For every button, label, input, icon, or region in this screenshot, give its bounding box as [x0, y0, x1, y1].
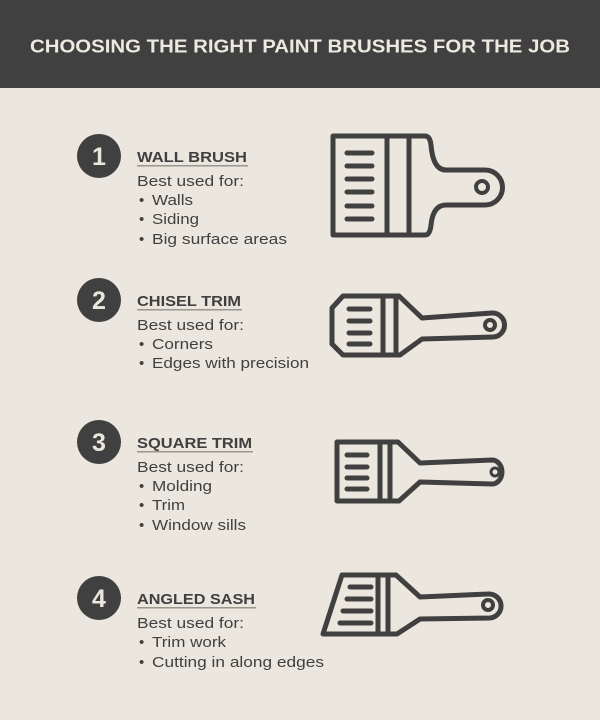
list: square trim uses: Best used for: — [137, 459, 244, 476]
heading: angled sash: ANGLED SASH — [137, 591, 255, 608]
list: square trim uses: Window sills — [152, 517, 246, 534]
list: wall brush uses: • — [139, 231, 144, 248]
list: wall brush uses: • — [139, 211, 144, 228]
list: square trim uses: Trim — [152, 497, 185, 514]
list: angled sash uses: • — [139, 654, 144, 671]
list: chisel trim uses: Edges with precision — [152, 355, 309, 372]
list: wall brush uses: Walls — [152, 192, 193, 209]
list: chisel trim uses: Best used for: — [137, 317, 244, 334]
list: square trim uses: • — [139, 497, 144, 514]
list: wall brush uses: Big surface areas — [152, 231, 287, 248]
number badge 3 — [77, 420, 121, 464]
list: angled sash uses — [137, 615, 324, 671]
number badge 2 — [77, 278, 121, 322]
heading: wall brush: WALL BRUSH — [137, 149, 247, 166]
list: chisel trim uses: • — [139, 336, 144, 353]
number badge 1 — [77, 134, 121, 178]
icon: chisel trim brush — [332, 296, 505, 355]
list: angled sash uses: Cutting in along edges — [152, 654, 324, 671]
header bar — [0, 0, 600, 88]
list: square trim uses: • — [139, 517, 144, 534]
list: chisel trim uses: Corners — [152, 336, 213, 353]
number badge 4 — [77, 576, 121, 620]
list: wall brush uses — [137, 173, 287, 248]
list: angled sash uses: Trim work — [152, 634, 227, 651]
number badge 2: 2 — [92, 287, 106, 315]
icon: wall brush — [333, 136, 503, 235]
title: CHOOSING THE RIGHT PAINT BRUSHES FOR THE JOB — [30, 36, 570, 56]
item 1: wall brush — [77, 134, 503, 248]
list: angled sash uses: Best used for: — [137, 615, 244, 632]
list: wall brush uses: • — [139, 192, 144, 209]
list: wall brush uses: Best used for: — [137, 173, 244, 190]
list: chisel trim uses — [137, 317, 309, 372]
icon: angled sash brush — [323, 575, 501, 634]
list: square trim uses: • — [139, 478, 144, 495]
heading: chisel trim: CHISEL TRIM — [137, 293, 241, 310]
icon: square trim brush — [337, 442, 502, 501]
list: chisel trim uses: • — [139, 355, 144, 372]
item 3: square trim — [77, 420, 502, 534]
list: square trim uses — [137, 459, 246, 534]
item 2: chisel trim — [77, 278, 505, 372]
list: wall brush uses: Siding — [152, 211, 199, 228]
item 4: angled sash — [77, 575, 501, 671]
number badge 4: 4 — [92, 585, 106, 613]
number badge 1: 1 — [92, 143, 106, 171]
list: square trim uses: Molding — [152, 478, 212, 495]
number badge 3: 3 — [92, 429, 106, 457]
list: angled sash uses: • — [139, 634, 144, 651]
heading: square trim: SQUARE TRIM — [137, 435, 252, 452]
